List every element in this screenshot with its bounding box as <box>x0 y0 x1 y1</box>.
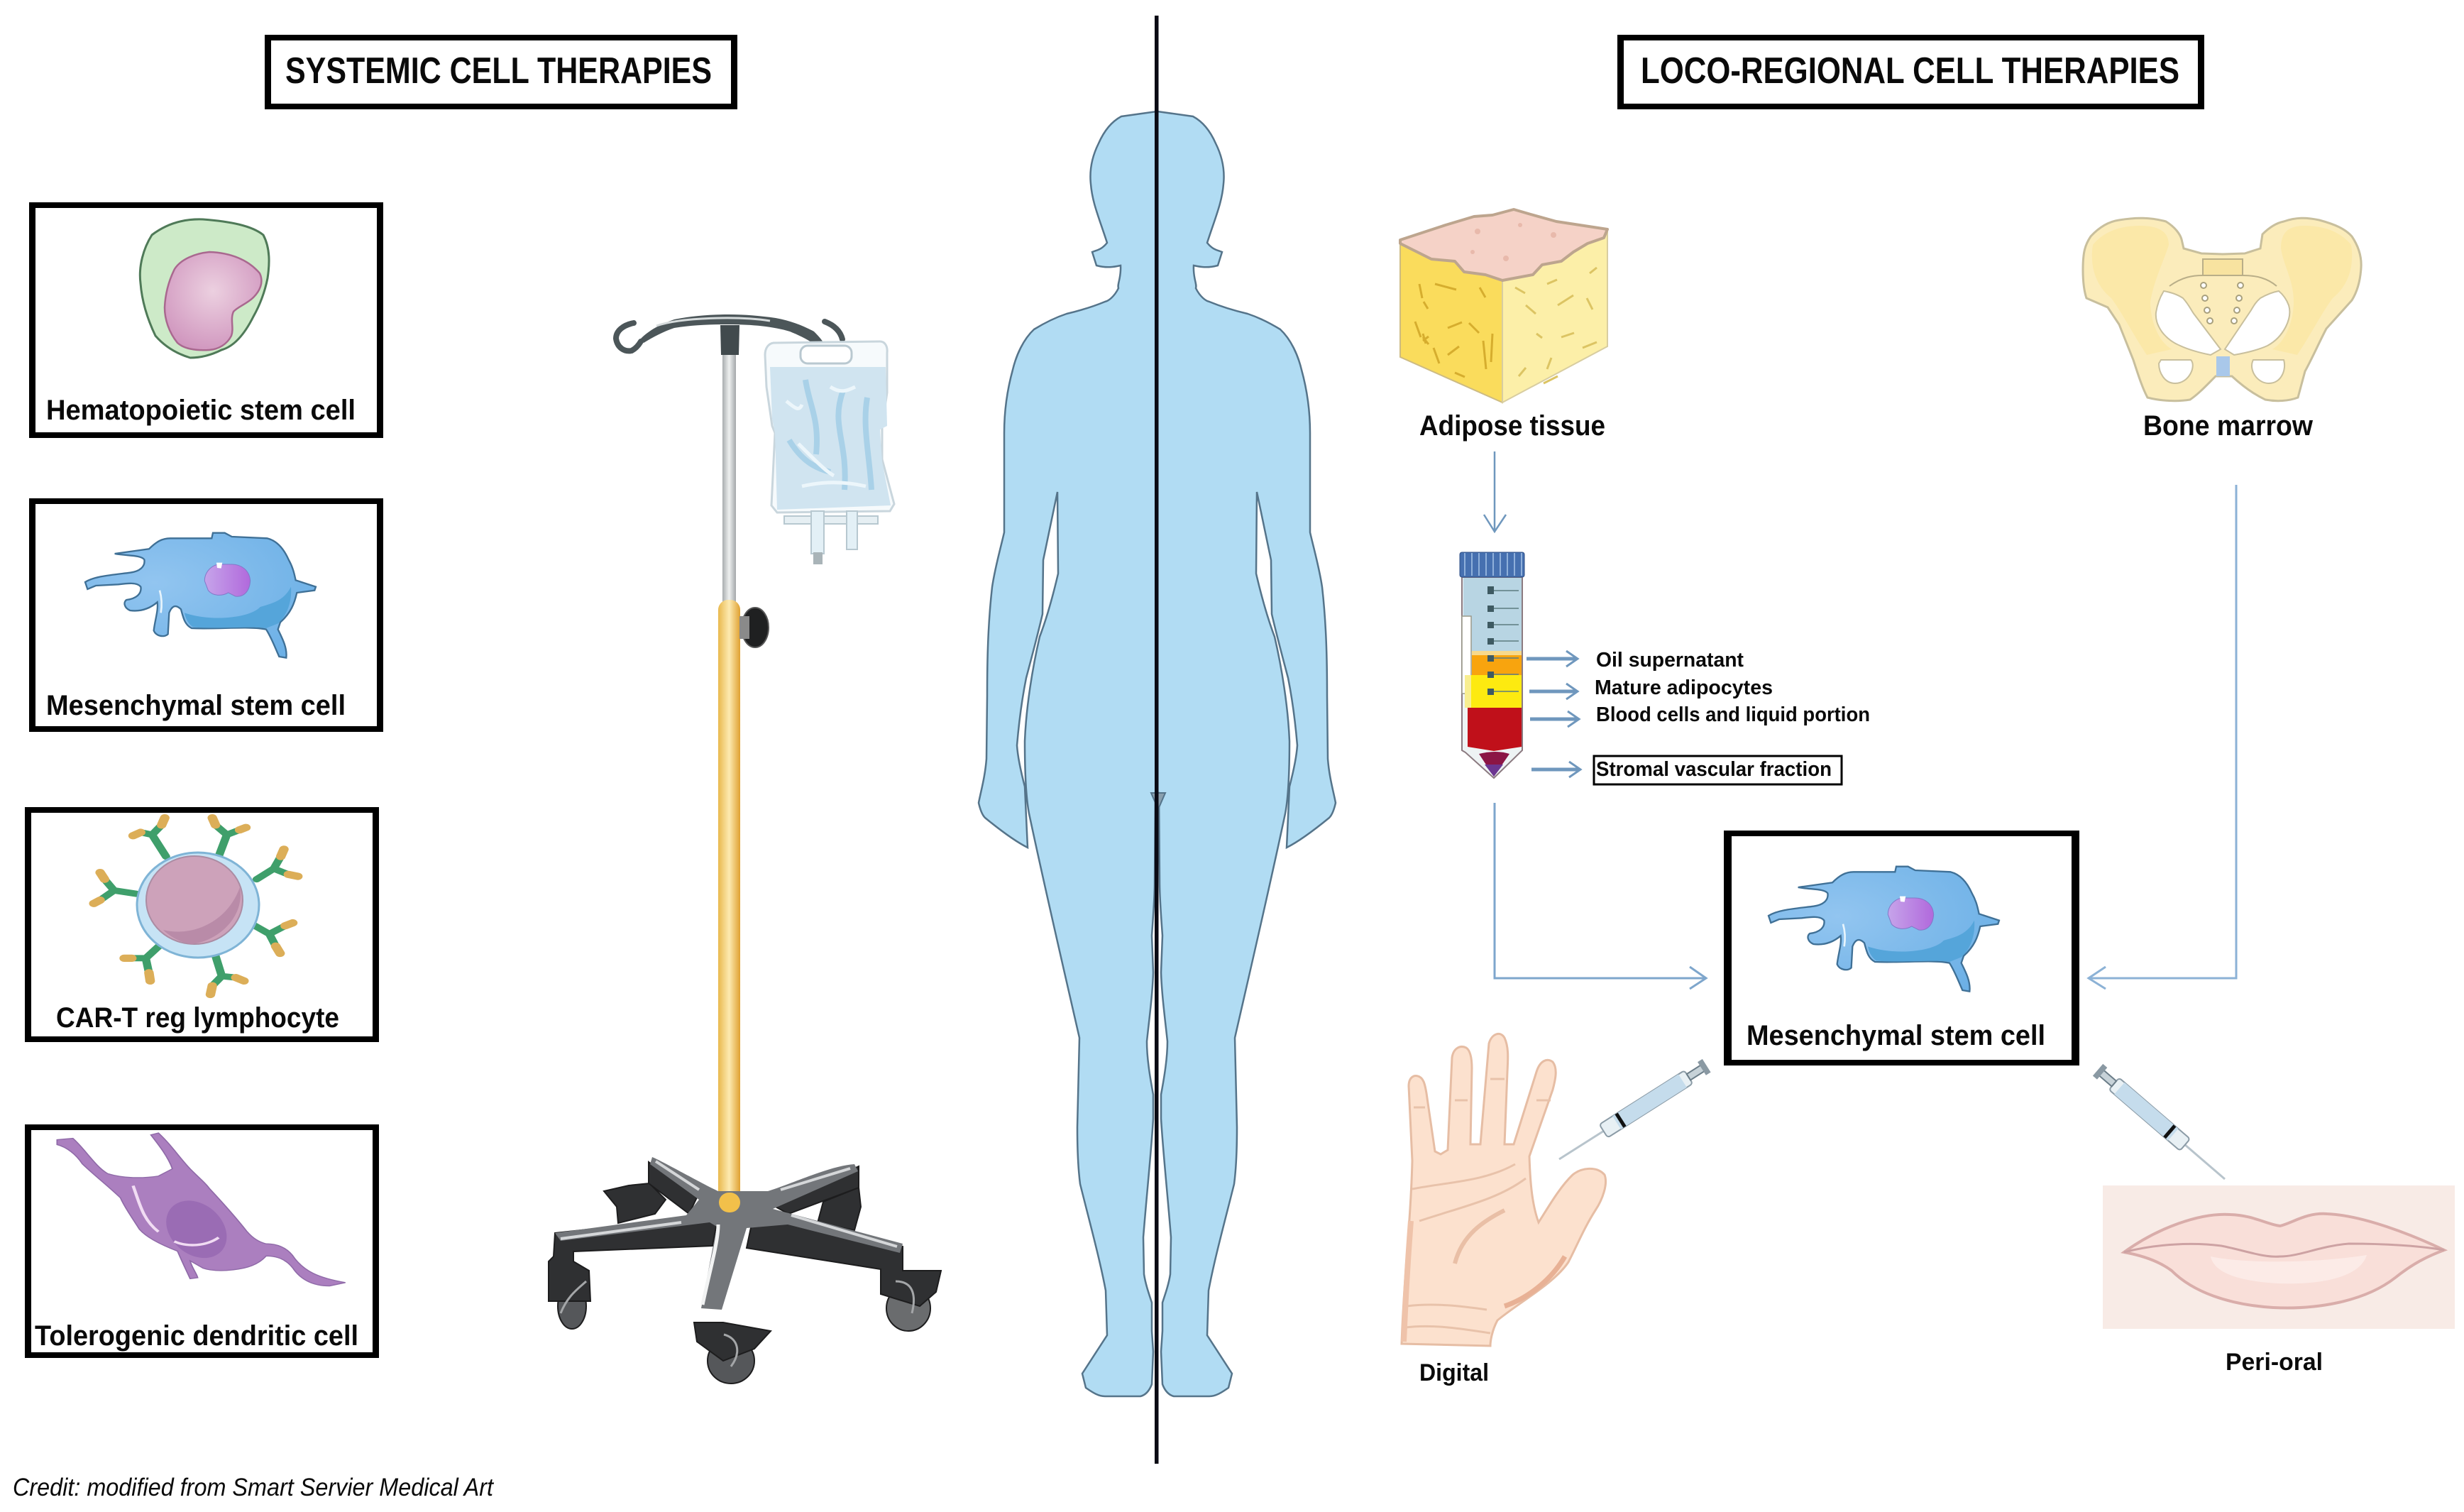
panel: mesenchymal stem cell (loco-regional) <box>1724 831 2079 1065</box>
label: oil supernatant: Oil supernatant <box>1596 649 1744 672</box>
icon: IV pole with infusion bag <box>549 314 941 1384</box>
icon: adipose tissue cube <box>1400 209 1607 402</box>
pole upper section <box>722 351 736 602</box>
wheeled base <box>549 1157 941 1384</box>
label: digital: Digital <box>1419 1359 1489 1386</box>
arrow: stromal fraction <box>1531 762 1580 777</box>
casters and undersides <box>549 1162 941 1384</box>
panel: CAR-T reg lymphocyte <box>25 807 379 1042</box>
infusion bag <box>765 341 894 513</box>
icon: centrifuge tube <box>1460 552 1524 778</box>
panel: hematopoietic stem cell: Hematopoietic stem cell <box>46 395 356 426</box>
arrow: bone marrow to mesenchymal stem cell <box>2089 485 2236 989</box>
panel: tolerogenic dendritic cell: Tolerogenic dendritic cell <box>35 1320 358 1352</box>
icon: mesenchymal stem cell <box>85 533 316 658</box>
label: adipose tissue: Adipose tissue <box>1419 410 1605 442</box>
icon: lips <box>2103 1185 2455 1329</box>
panel: CAR-T reg lymphocyte: CAR-T reg lymphocyte <box>56 1002 339 1034</box>
arrow: oil supernatant <box>1527 651 1578 667</box>
label: peri-oral: Peri-oral <box>2226 1349 2323 1376</box>
icon: pelvis <box>2083 218 2361 401</box>
panel: mesenchymal stem cell (loco-regional): Mesenchymal stem cell <box>1747 1020 2045 1051</box>
arrow: tube to mesenchymal stem cell <box>1495 803 1706 989</box>
panel: mesenchymal stem cell (systemic) <box>29 498 383 732</box>
arrow: mature adipocytes <box>1529 684 1578 699</box>
icon: hand <box>1402 1034 1606 1346</box>
adjustment knob <box>742 608 769 647</box>
icon: hematopoietic stem cell <box>140 219 269 358</box>
icon: dendritic cell <box>57 1133 346 1286</box>
title: loco-regional cell therapies: LOCO-REGIONAL CELL THERAPIES <box>1641 50 2179 92</box>
arrow: adipose tissue to tube <box>1484 451 1506 532</box>
central dividing line <box>1155 16 1158 1464</box>
legs top surface <box>555 1157 903 1310</box>
title: systemic cell therapies: SYSTEMIC CELL THERAPIES <box>285 50 712 92</box>
icon: CAR-T cell with antibodies <box>94 818 298 995</box>
panel: hematopoietic stem cell <box>29 202 383 438</box>
icon: mesenchymal stem cell <box>1769 867 1999 992</box>
human body silhouette <box>979 111 1336 1396</box>
credit line: Credit: modified from Smart Servier Medical Art <box>13 1474 494 1501</box>
arrow: blood cells <box>1530 711 1579 727</box>
pole lower section <box>718 600 740 1212</box>
label: mature adipocytes: Mature adipocytes <box>1595 676 1773 699</box>
icon: syringe to hand <box>1555 1059 1711 1166</box>
label: blood cells and liquid portion: Blood cells and liquid portion <box>1596 703 1870 726</box>
title: systemic cell therapies <box>265 35 737 109</box>
label: stromal vascular fraction: Stromal vascular fraction <box>1596 758 1832 781</box>
hanger bar <box>641 314 827 349</box>
panel: mesenchymal stem cell (systemic): Mesenchymal stem cell <box>46 690 346 721</box>
title: loco-regional cell therapies <box>1617 35 2204 109</box>
panel: tolerogenic dendritic cell <box>25 1124 379 1358</box>
icon: syringe to lips <box>2093 1064 2230 1185</box>
label: bone marrow: Bone marrow <box>2143 410 2314 442</box>
